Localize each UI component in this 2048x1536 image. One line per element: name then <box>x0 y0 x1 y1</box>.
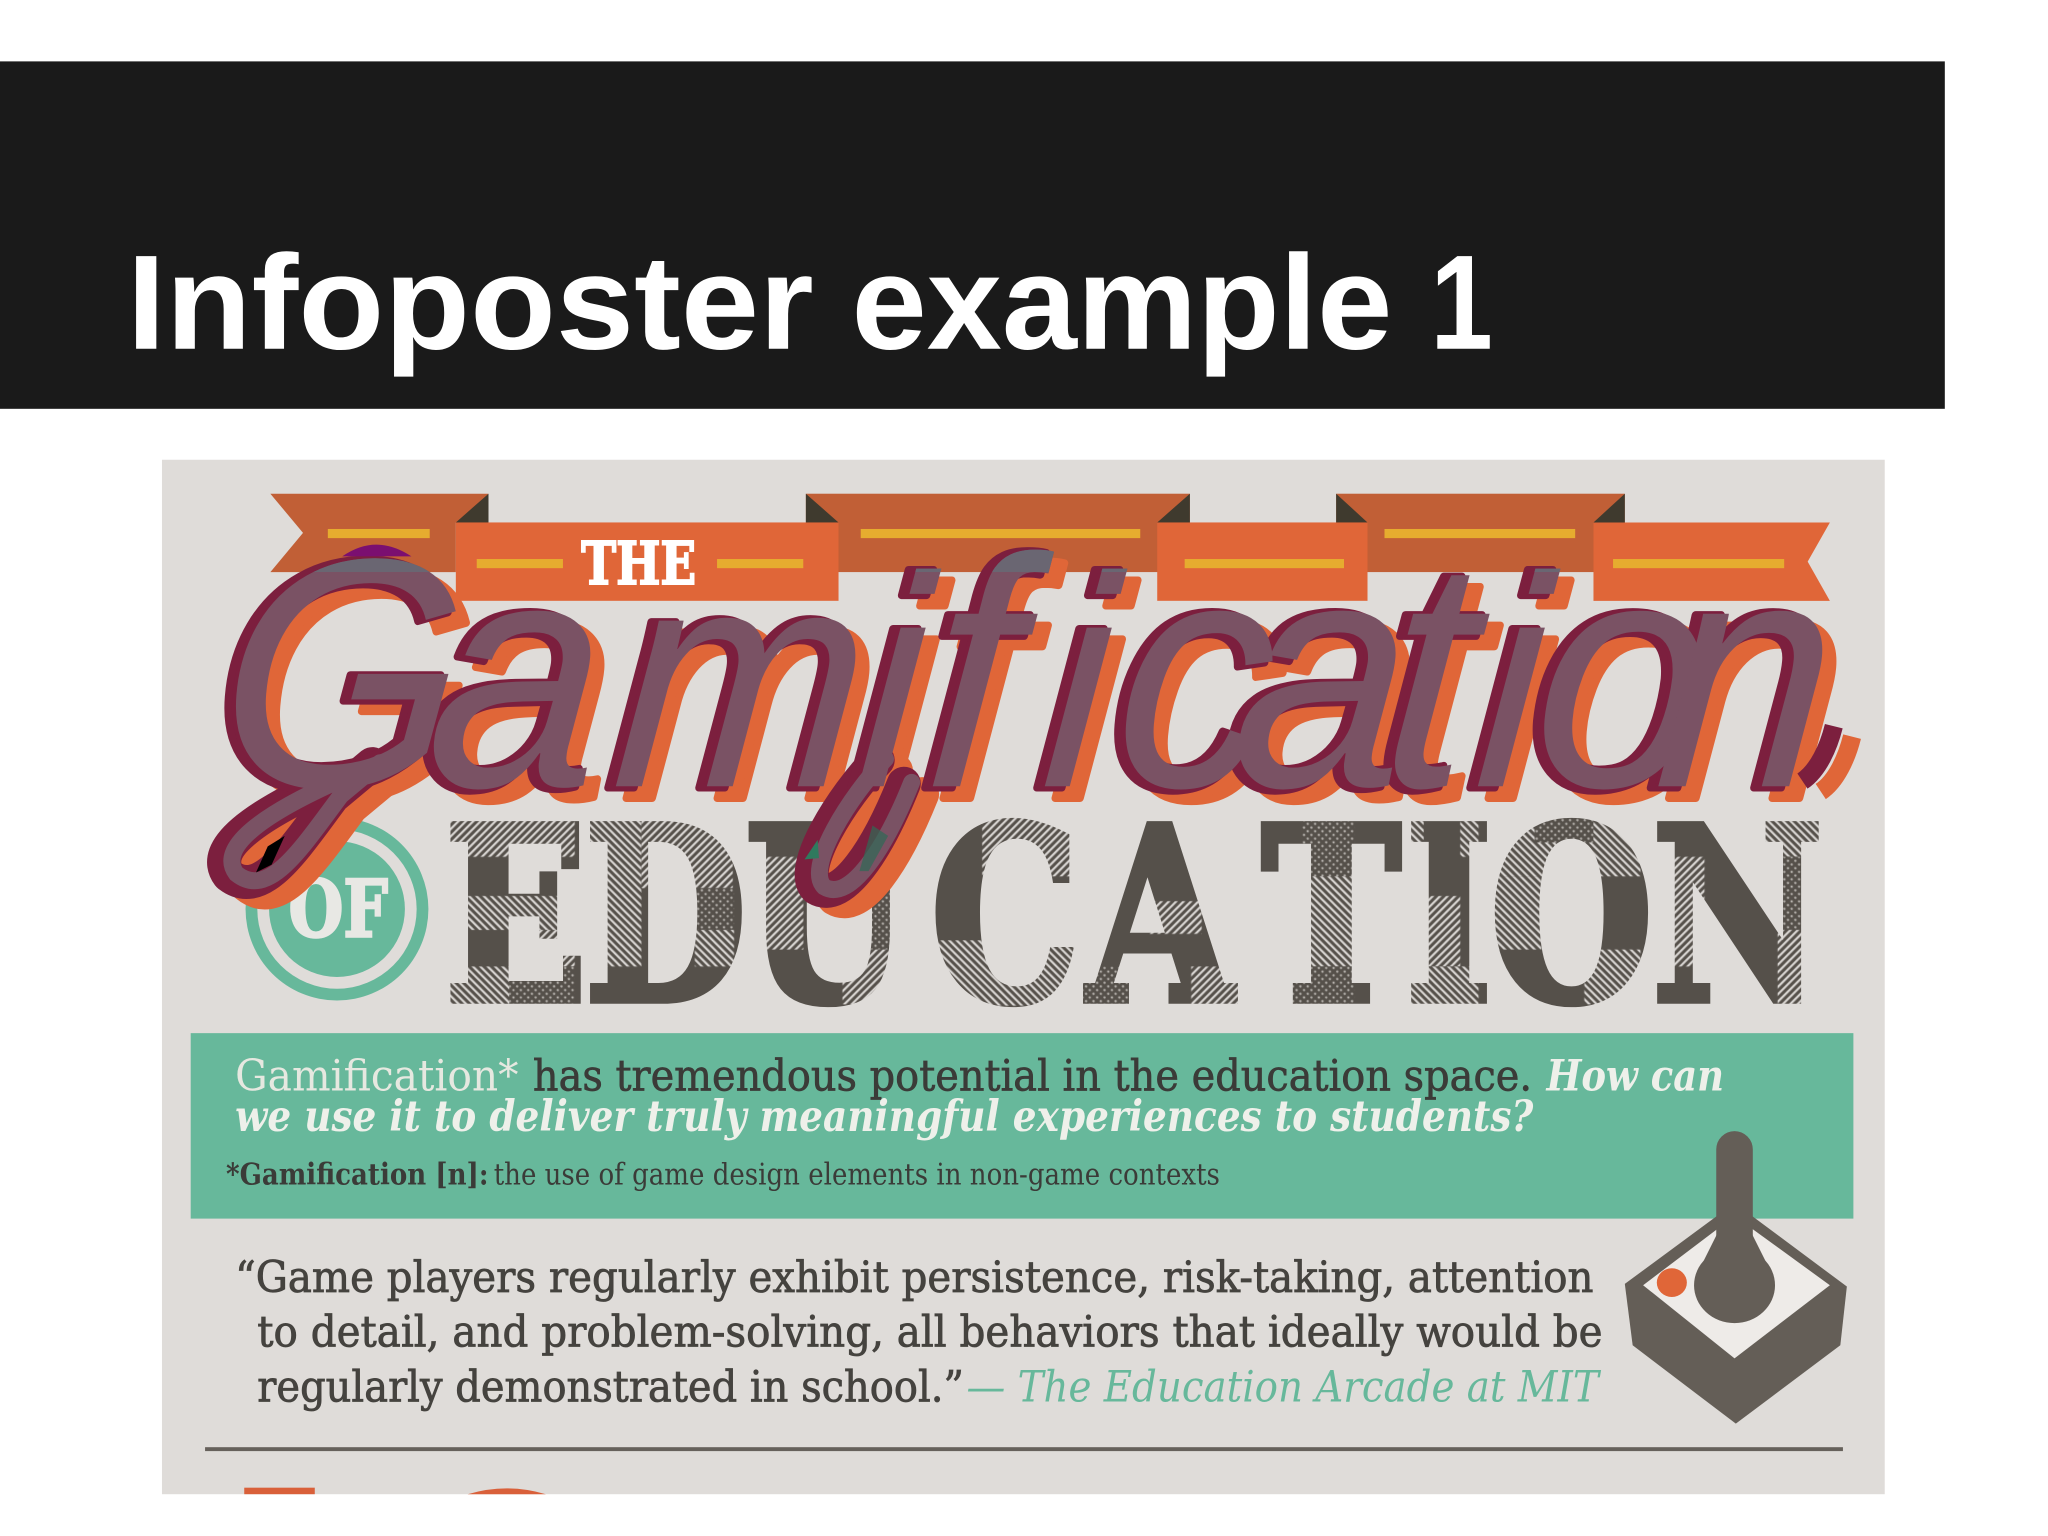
orange shadow layer: c <box>1116 502 1300 868</box>
compression artefacts on script <box>256 545 888 872</box>
mauve inner layer: f <box>917 490 1062 856</box>
word: EDUCATION: C <box>930 775 1080 1058</box>
mauve inner layer: G <box>208 490 479 856</box>
maroon layer: i <box>1460 516 1558 852</box>
back ribbon segments <box>270 494 1625 572</box>
maroon layer: t <box>1366 492 1492 857</box>
definition: *Gamification [n]: <box>226 1158 488 1193</box>
quote <box>235 1253 1603 1412</box>
mauve inner layer: i <box>1035 515 1133 851</box>
divider <box>205 1447 1843 1451</box>
intro text line 1: Gamification* <box>235 1052 519 1102</box>
script word: Gamification <box>200 490 1860 901</box>
mauve inner layer: i <box>1468 515 1566 851</box>
mauve inner layer <box>208 490 1849 890</box>
maroon layer: m <box>598 504 874 854</box>
definition <box>226 1158 1220 1193</box>
slide title <box>127 227 1493 378</box>
maroon layer: a <box>410 492 612 857</box>
grey overlap on the ribbon: G <box>208 490 479 856</box>
mauve inner layer: t <box>1373 490 1500 856</box>
slide title: Infoposter <box>127 227 814 378</box>
ribbon folds <box>456 494 1625 522</box>
mauve inner layer: a <box>1223 490 1425 856</box>
word: EDUCATION: U <box>745 775 909 1058</box>
orange shadow layer: i <box>1045 527 1144 863</box>
grey overlap on the ribbon: t <box>1373 490 1500 856</box>
maroon layer: i <box>841 516 939 852</box>
grey overlap on the ribbon: i <box>1468 515 1566 851</box>
grey overlap on the ribbon: o <box>1524 490 1725 856</box>
orange shadow layer: G <box>219 502 489 868</box>
quote: to detail, and problem-solving, all behaviors that ideally would be <box>257 1308 1603 1358</box>
title bar <box>0 61 1945 409</box>
grey overlap on the ribbon: f <box>917 490 1062 856</box>
intro text line 2: we use it to deliver truly meaningful experiences to students? <box>235 1092 1534 1142</box>
maroon layer: G <box>200 492 471 857</box>
mauve inner layer: o <box>1524 490 1725 856</box>
word: THE: THE <box>581 529 696 598</box>
quote: “Game players regularly exhibit persistence, risk-taking, attention <box>235 1253 1593 1303</box>
grey overlap on the ribbon: i <box>1035 515 1133 851</box>
grey overlap on the ribbon: c <box>1105 490 1290 856</box>
maroon layer: n <box>1640 492 1842 857</box>
orange shadow layer: i <box>1479 527 1577 863</box>
intro text line 1: has tremendous potential in the education space. <box>533 1052 1532 1102</box>
orange shadow layer: o <box>1534 502 1736 868</box>
maroon layer: o <box>1516 492 1717 857</box>
badge: OF: OF <box>289 863 388 955</box>
gold ribbon dashes <box>328 529 1784 568</box>
word: EDUCATION: A <box>1085 775 1236 1058</box>
mauve inner layer: n <box>1648 490 1849 856</box>
grey overlap on the ribbon: n <box>1648 490 1849 856</box>
word: EDUCATION: O <box>1489 775 1654 1058</box>
mauve inner layer: c <box>1105 490 1290 856</box>
orange shadow layer: t <box>1384 502 1510 868</box>
word: EDUCATION: I <box>1405 775 1493 1058</box>
grey overlap on the ribbon: a <box>418 490 620 856</box>
orange shadow layer: n <box>1658 502 1860 868</box>
slide title: 1 <box>1430 227 1493 378</box>
slide title: example <box>852 227 1392 378</box>
grey overlap on the ribbon <box>314 550 1560 572</box>
orange shadow layer: i <box>859 527 958 863</box>
orange shadow layer: a <box>1234 502 1435 868</box>
panel: infographic crop <box>162 460 1885 1494</box>
word: EDUCATION: E <box>444 775 588 1058</box>
grey overlap on the ribbon: a <box>1223 490 1425 856</box>
panel: teal intro band <box>191 1033 1853 1219</box>
orange shadow layer: m <box>616 515 892 865</box>
word: EDUCATION: T <box>1261 775 1401 1058</box>
orange shadow layer: f <box>927 502 1073 868</box>
word: EDUCATION: D <box>584 775 747 1058</box>
mauve inner layer: m <box>606 503 882 853</box>
grey overlap on the ribbon: m <box>606 503 882 853</box>
quote attribution: — The Education Arcade at MIT <box>967 1362 1602 1412</box>
front ribbon segments <box>456 522 1830 601</box>
word: EDUCATION: N <box>1651 775 1824 1058</box>
grey overlap on the ribbon: i <box>849 515 947 851</box>
quote: regularly demonstrated in school.” <box>257 1362 964 1412</box>
mauve inner layer: i <box>849 515 947 851</box>
maroon layer: f <box>909 492 1054 857</box>
badge: OF <box>246 818 428 1000</box>
definition: the use of game design elements in non-game contexts <box>494 1158 1220 1193</box>
mauve inner layer: a <box>418 490 620 856</box>
maroon layer: c <box>1098 492 1282 857</box>
orange shadow layer <box>219 502 1860 901</box>
cropped next-section shapes <box>244 1488 546 1494</box>
banner ribbon <box>270 494 1830 601</box>
intro text line 1: How can <box>1545 1052 1724 1102</box>
maroon layer: i <box>1027 516 1125 852</box>
orange shadow layer: a <box>428 502 630 868</box>
icon: joystick <box>1625 1131 1847 1424</box>
maroon layer <box>200 492 1842 891</box>
maroon layer: a <box>1215 492 1417 857</box>
